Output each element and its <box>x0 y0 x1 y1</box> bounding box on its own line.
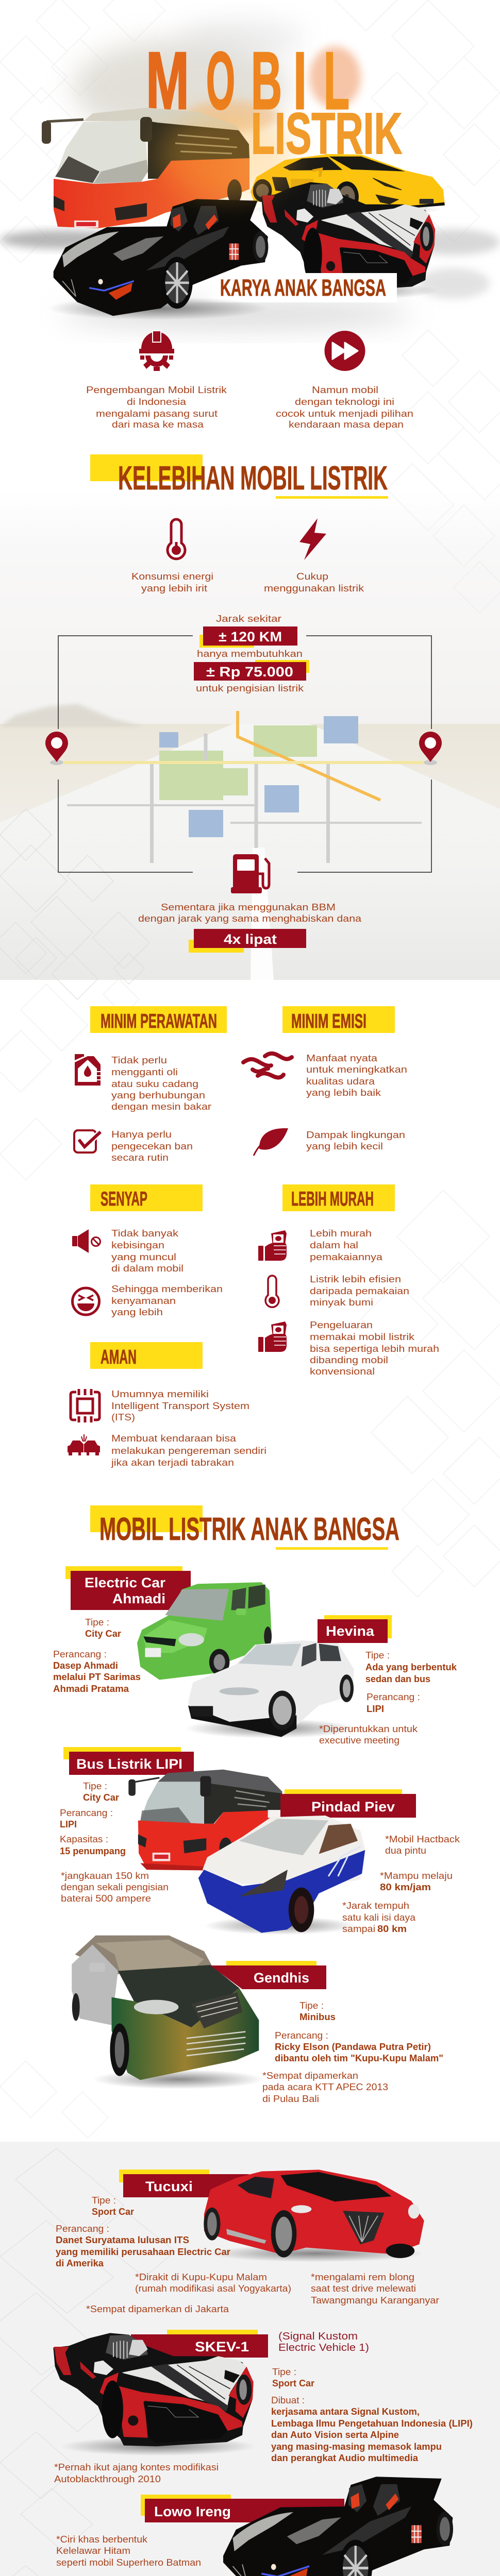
text: tidak banyak: di dalam mobil <box>111 1263 184 1274</box>
text: umumnya memiliki <box>111 1388 249 1422</box>
badge: rp 75.000: ± Rp 75.000 <box>206 664 293 680</box>
title: LISTRIK: LISTRIK <box>251 101 402 166</box>
text: ahmadi type <box>85 1617 121 1639</box>
text: ahmadi designer: Dasep Ahmadi <box>53 1660 118 1671</box>
text: tucuxi details: *mengalami rem blong <box>311 2272 414 2282</box>
text: gendhis details: Ricky Elson (Pandawa Putra Petir) <box>275 2041 431 2052</box>
text: piev details: dua pintu <box>385 1845 426 1856</box>
text: tucuxi details: yang memiliki perusahaan Electric Car <box>56 2246 230 2257</box>
panel: minim emisi: MINIM EMISI <box>291 1010 366 1032</box>
heading: kelebihan mobil listrik <box>90 454 388 499</box>
car: lowo ireng <box>217 2477 453 2576</box>
text: membuat kendaraan: jika akan terjadi tabrakan <box>111 1457 234 1468</box>
label: skev-1: SKEV-1 <box>195 2339 249 2354</box>
text: skev note: Autoblackthrough 2010 <box>54 2473 161 2484</box>
text: gendhis details: Tipe : <box>299 2000 324 2011</box>
text: hevina details: Ada yang berbentuk <box>365 1662 457 1672</box>
label: untuk pengisian listrik: untuk pengisian listrik <box>196 683 304 693</box>
hero yellow car <box>251 154 445 216</box>
panel: senyap: SENYAP <box>101 1188 147 1210</box>
text: bus details: LIPI <box>60 1819 77 1829</box>
text: piev details: satu kali isi daya <box>342 1912 416 1923</box>
text: tucuxi details: (rumah modifikasi asal Yogyakarta) <box>135 2283 291 2294</box>
text: lebih murah: pemakaiannya <box>310 1251 383 1262</box>
text: gendhis details <box>262 2000 443 2104</box>
text: konsumsi energi: yang lebih irit <box>141 583 207 594</box>
icon: lightning bolt <box>299 518 326 560</box>
text: membuat kendaraan: Membuat kendaraan bisa <box>111 1433 237 1444</box>
badge: 4x lipat <box>189 929 306 953</box>
text: skev note: *Pernah ikut ajang kontes modifikasi <box>54 2462 219 2472</box>
title: MOBIL <box>146 36 349 126</box>
text: sementara: dengan jarak yang sama menghabiskan dana <box>138 913 362 924</box>
text: skev details: Sport Car <box>272 2378 314 2388</box>
text: bus details: Tipe : <box>83 1781 107 1791</box>
text: piev details: *Mobil Hactback <box>385 1834 460 1844</box>
text: tidak perlu mengganti oli: yang berhubungan <box>111 1090 205 1100</box>
panel: minim emisi <box>282 1006 395 1033</box>
text: listrik lebih efisien: minyak bumi <box>310 1297 373 1308</box>
car: green city car <box>137 1582 272 1680</box>
icon: checkbox <box>74 1130 101 1153</box>
text: skev details: kerjasama antara Signal Kustom, <box>271 2406 420 2417</box>
text: tidak perlu mengganti oli: mengganti oli <box>111 1066 178 1077</box>
panel: minim perawatan: MINIM PERAWATAN <box>101 1010 217 1032</box>
text: umumnya memiliki: (ITS) <box>111 1412 135 1422</box>
panel: lebih murah <box>282 1184 395 1211</box>
icon: oil can <box>75 1054 101 1086</box>
text: membuat kendaraan <box>111 1433 266 1468</box>
car: gendhis minivan <box>72 1936 264 2089</box>
text: piev details: *Jarak tempuh <box>342 1900 409 1911</box>
car: tucuxi red <box>204 2170 424 2262</box>
text: skev details <box>271 2366 473 2463</box>
title: MOBIL: O <box>206 36 235 126</box>
text: skev details: Dibuat : <box>271 2395 305 2405</box>
text: konsumsi energi: Konsumsi energi <box>131 571 213 582</box>
text: tidak banyak: yang muncul <box>111 1251 176 1262</box>
text: bus details: dengan sekali pengisian <box>61 1882 169 1892</box>
label: electric car ahmadi: Ahmadi <box>112 1591 165 1606</box>
icon: laughing face <box>72 1288 99 1315</box>
text: bus details: Kapasitas : <box>60 1834 108 1844</box>
text: tidak banyak: Tidak banyak <box>111 1228 179 1239</box>
text: tucuxi details: Danet Suryatama lulusan ITS <box>56 2234 189 2245</box>
subtitle: karya anak bangsa <box>180 273 397 302</box>
panel: aman <box>90 1342 203 1369</box>
text: dampak lingkungan: yang lebih kecil <box>306 1141 383 1151</box>
text: listrik lebih efisien: Listrik lebih efisien <box>310 1274 401 1284</box>
text: sehingga <box>111 1283 223 1317</box>
car: pindad piev <box>198 1816 365 1935</box>
text: hanya perlu: secara rutin <box>111 1152 169 1163</box>
icon: air waves <box>243 1054 292 1078</box>
text: lowo notes left <box>55 2534 214 2576</box>
text: namun mobil: cocok untuk menjadi pilihan <box>276 408 413 419</box>
text: gendhis details: *Sempat dipamerkan <box>262 2070 358 2081</box>
text: tidak banyak <box>111 1228 184 1274</box>
panel: senyap <box>90 1184 203 1211</box>
icon: chip <box>71 1389 99 1422</box>
text: pengembangan: dari masa ke masa <box>112 419 204 430</box>
label: electric car ahmadi <box>65 1566 191 1610</box>
label: skev-1 <box>131 2330 268 2358</box>
badge: 4x lipat: 4x lipat <box>224 931 277 947</box>
text: dampak lingkungan <box>306 1129 405 1151</box>
label: electric car ahmadi: Electric Car <box>85 1575 166 1590</box>
icon: thermometer small <box>265 1276 279 1307</box>
label: tucuxi: Tucuxi <box>145 2179 193 2194</box>
text: skev details: Lembaga Ilmu Pengetahuan Indonesia (LIPI) <box>271 2418 473 2429</box>
title: MOBIL: L <box>324 36 349 126</box>
label: tucuxi <box>119 2170 249 2197</box>
text: tucuxi details: Sport Car <box>92 2206 134 2217</box>
text: bus details: 15 penumpang <box>60 1845 126 1856</box>
badge: 120 km <box>199 626 297 648</box>
car: white sedan <box>185 1640 357 1738</box>
text: manfaat nyata: yang lebih baik <box>306 1087 381 1098</box>
text: tucuxi details: *Dirakit di Kupu-Kupu Malam <box>135 2272 267 2282</box>
text: namun mobil: Namun mobil <box>312 384 378 395</box>
text: tidak perlu mengganti oli: Tidak perlu <box>111 1055 167 1065</box>
text: lebih murah <box>310 1228 383 1262</box>
text: piev details: *Mampu melaju <box>380 1870 453 1881</box>
hero skev car <box>261 182 437 300</box>
text: pengeluaran: Pengeluaran <box>310 1319 373 1330</box>
text: hevina details: executive meeting <box>319 1735 399 1745</box>
text: pengembangan: mengalami pasang surut <box>96 408 218 419</box>
text: piev details: sampai <box>342 1923 375 1934</box>
text: ahmadi designer <box>53 1649 141 1694</box>
map diagram <box>45 636 442 872</box>
text: skev details: Tipe : <box>272 2366 296 2377</box>
grey section lattice <box>0 2148 175 2576</box>
text: tucuxi details: Tipe : <box>92 2195 116 2206</box>
text: bus details: City Car <box>83 1792 119 1803</box>
road section lattice <box>0 809 149 999</box>
text: hevina details: Tipe : <box>365 1650 390 1660</box>
text: konsumsi energi <box>131 571 213 594</box>
text: membuat kendaraan: melakukan pengereman sendiri <box>111 1445 266 1456</box>
text: lebih murah: Lebih murah <box>310 1228 372 1239</box>
text: pengembangan <box>86 384 227 430</box>
text: piev details <box>342 1834 460 1934</box>
text: ahmadi designer: Perancang : <box>53 1649 107 1659</box>
text: skev full name: Electric Vehicle 1) <box>278 2342 369 2353</box>
hero warm glow <box>160 111 294 198</box>
text: bus details: *jangkauan 150 km <box>61 1870 149 1881</box>
label: bus listrik lipi <box>63 1747 194 1775</box>
text: skev full name: (Signal Kustom <box>278 2331 358 2342</box>
text: bus details: Perancang : <box>60 1807 113 1818</box>
text: pengembangan: di Indonesia <box>127 396 187 407</box>
text: sementara: Sementara jika menggunakan BBM <box>161 902 336 912</box>
text: pengeluaran: konvensional <box>310 1366 375 1377</box>
icon: helmet gear <box>139 331 174 371</box>
text: umumnya memiliki: Intelligent Transport System <box>111 1400 249 1411</box>
text: tidak perlu mengganti oli: dengan mesin bakar <box>111 1101 211 1112</box>
hero black car <box>47 199 268 320</box>
text: manfaat nyata: kualitas udara <box>306 1076 375 1087</box>
text: lowo notes left: Kelelawar Hitam <box>56 2545 130 2556</box>
text: sehingga: yang lebih <box>111 1307 163 1317</box>
icon: fast forward <box>325 331 365 371</box>
hero bus <box>42 108 249 228</box>
text: sehingga: kenyamanan <box>111 1295 176 1306</box>
text: cukup menggunakan listrik: Cukup <box>296 571 328 582</box>
text: namun mobil: dengan teknologi ini <box>295 396 394 407</box>
text: pengeluaran: memakai mobil listrik <box>310 1331 415 1342</box>
panel: minim perawatan <box>90 1006 227 1033</box>
panel: lebih murah: LEBIH MURAH <box>291 1188 374 1210</box>
text: pengeluaran: dibanding mobil <box>310 1354 388 1365</box>
text: tucuxi details: Perancang : <box>56 2223 109 2234</box>
panel: aman: AMAN <box>101 1346 137 1368</box>
text: manfaat nyata: Manfaat nyata <box>306 1053 378 1063</box>
text: hanya perlu <box>111 1129 193 1163</box>
label: pindad piev: Pindad Piev <box>311 1799 395 1815</box>
text: skev full name <box>278 2331 369 2353</box>
text: tidak perlu mengganti oli <box>111 1055 211 1112</box>
label: gendhis <box>210 1961 326 1989</box>
text: tucuxi details: di Amerika <box>56 2258 104 2268</box>
text: gendhis details: Minibus <box>299 2011 336 2022</box>
text: namun mobil: kendaraan masa depan <box>289 419 404 430</box>
text: pengembangan: Pengembangan Mobil Listrik <box>86 384 227 395</box>
icon: crash cars <box>68 1434 100 1455</box>
text: lowo notes left: *Ciri khas berbentuk <box>56 2534 148 2545</box>
icon: thermometer <box>168 519 185 559</box>
car: bus <box>128 1770 282 1870</box>
icon: fuel pump <box>231 854 269 893</box>
text: gendhis details: di Pulau Bali <box>262 2093 319 2104</box>
text: manfaat nyata <box>306 1053 407 1098</box>
title: MOBIL: B <box>251 36 282 126</box>
subtitle: karya anak bangsa: KARYA ANAK BANGSA <box>220 275 386 301</box>
label: bus listrik lipi: Bus Listrik LIPI <box>76 1756 182 1772</box>
text: skev note <box>54 2462 219 2484</box>
text: cukup menggunakan listrik: menggunakan listrik <box>264 583 364 594</box>
text: sehingga: Sehingga memberikan <box>111 1283 223 1294</box>
label: lowo ireng <box>141 2495 344 2522</box>
text: piev details: 80 km <box>377 1923 407 1934</box>
text: listrik lebih efisien <box>310 1274 409 1308</box>
text: ahmadi designer: Ahmadi Pratama <box>53 1683 129 1694</box>
text: tucuxi details: Tawangmangu Karanganyar <box>311 2295 439 2306</box>
text: bus details <box>60 1781 169 1904</box>
text: ahmadi designer: melalui PT Sarimas <box>53 1671 141 1682</box>
text: hevina details: sedan dan bus <box>365 1673 430 1684</box>
text: tucuxi details: *Sempat dipamerkan di Jakarta <box>86 2303 229 2314</box>
text: gendhis details: pada acara KTT APEC 2013 <box>262 2081 388 2092</box>
text: piev details: 80 km/jam <box>380 1882 431 1892</box>
heading: mobil listrik anak bangsa <box>90 1505 399 1550</box>
label: hevina: Hevina <box>326 1623 375 1639</box>
text: hanya perlu: pengecekan ban <box>111 1141 193 1151</box>
text: skev details: dan perangkat Audio multimedia <box>271 2452 419 2463</box>
text: hevina details: LIPI <box>366 1703 384 1714</box>
text: sementara <box>138 902 362 924</box>
text: skev details: dan Auto Vision serta Alpine <box>271 2429 399 2440</box>
text: tucuxi details: saat test drive melewati <box>311 2283 416 2294</box>
text: pengeluaran <box>310 1319 439 1377</box>
label: gendhis: Gendhis <box>254 1970 309 1986</box>
label: hevina <box>318 1615 392 1643</box>
text: gendhis details: Perancang : <box>275 2030 328 2041</box>
label: hanya membutuhkan: hanya membutuhkan <box>197 648 303 659</box>
text: lebih murah: dalam hal <box>310 1240 358 1250</box>
badge: rp 75.000 <box>194 660 309 681</box>
text: hevina details: *Diperuntukkan untuk <box>319 1723 418 1734</box>
icon: silent speaker <box>72 1229 100 1253</box>
text: umumnya memiliki: Umumnya memiliki <box>111 1388 209 1399</box>
hero smoke background <box>0 21 500 329</box>
text: tidak banyak: kebisingan <box>111 1240 164 1250</box>
text: ahmadi type: City Car <box>85 1628 121 1639</box>
text: tucuxi details <box>56 2195 439 2314</box>
text: dampak lingkungan: Dampak lingkungan <box>306 1129 405 1140</box>
car: skev-1 <box>53 2333 256 2456</box>
text: manfaat nyata: untuk meningkatkan <box>306 1064 407 1075</box>
text: cukup menggunakan listrik <box>264 571 364 594</box>
text: hevina details: Perancang : <box>366 1691 420 1702</box>
text: lowo notes left: seperti mobil Superhero Batman <box>56 2557 201 2568</box>
text: ahmadi type: Tipe : <box>85 1617 109 1628</box>
label: jarak sekitar: Jarak sekitar <box>216 613 281 624</box>
icon: hand with money 2 <box>258 1321 287 1352</box>
label: pindad piev <box>280 1789 416 1818</box>
text: listrik lebih efisien: daripada pemakaian <box>310 1285 409 1296</box>
text: hanya perlu: Hanya perlu <box>111 1129 172 1140</box>
icon: hand with money <box>258 1230 287 1261</box>
text: namun mobil <box>276 384 413 430</box>
text: pengeluaran: bisa sepertiga lebih murah <box>310 1343 439 1354</box>
icon: leaf <box>254 1128 288 1156</box>
label: lowo ireng: Lowo Ireng <box>154 2504 231 2519</box>
text: hevina details <box>319 1650 457 1745</box>
text: tidak perlu mengganti oli: atau suku cadang <box>111 1078 198 1089</box>
title: MOBIL: I <box>293 36 307 126</box>
text: skev details: yang masing-masing memasok lampu <box>271 2441 442 2452</box>
badge: 120 km: ± 120 KM <box>219 629 282 645</box>
title: MOBIL: M <box>146 36 189 126</box>
text: bus details: baterai 500 ampere <box>61 1893 151 1904</box>
text: gendhis details: dibantu oleh tim "Kupu-Kupu Malam" <box>275 2053 443 2063</box>
